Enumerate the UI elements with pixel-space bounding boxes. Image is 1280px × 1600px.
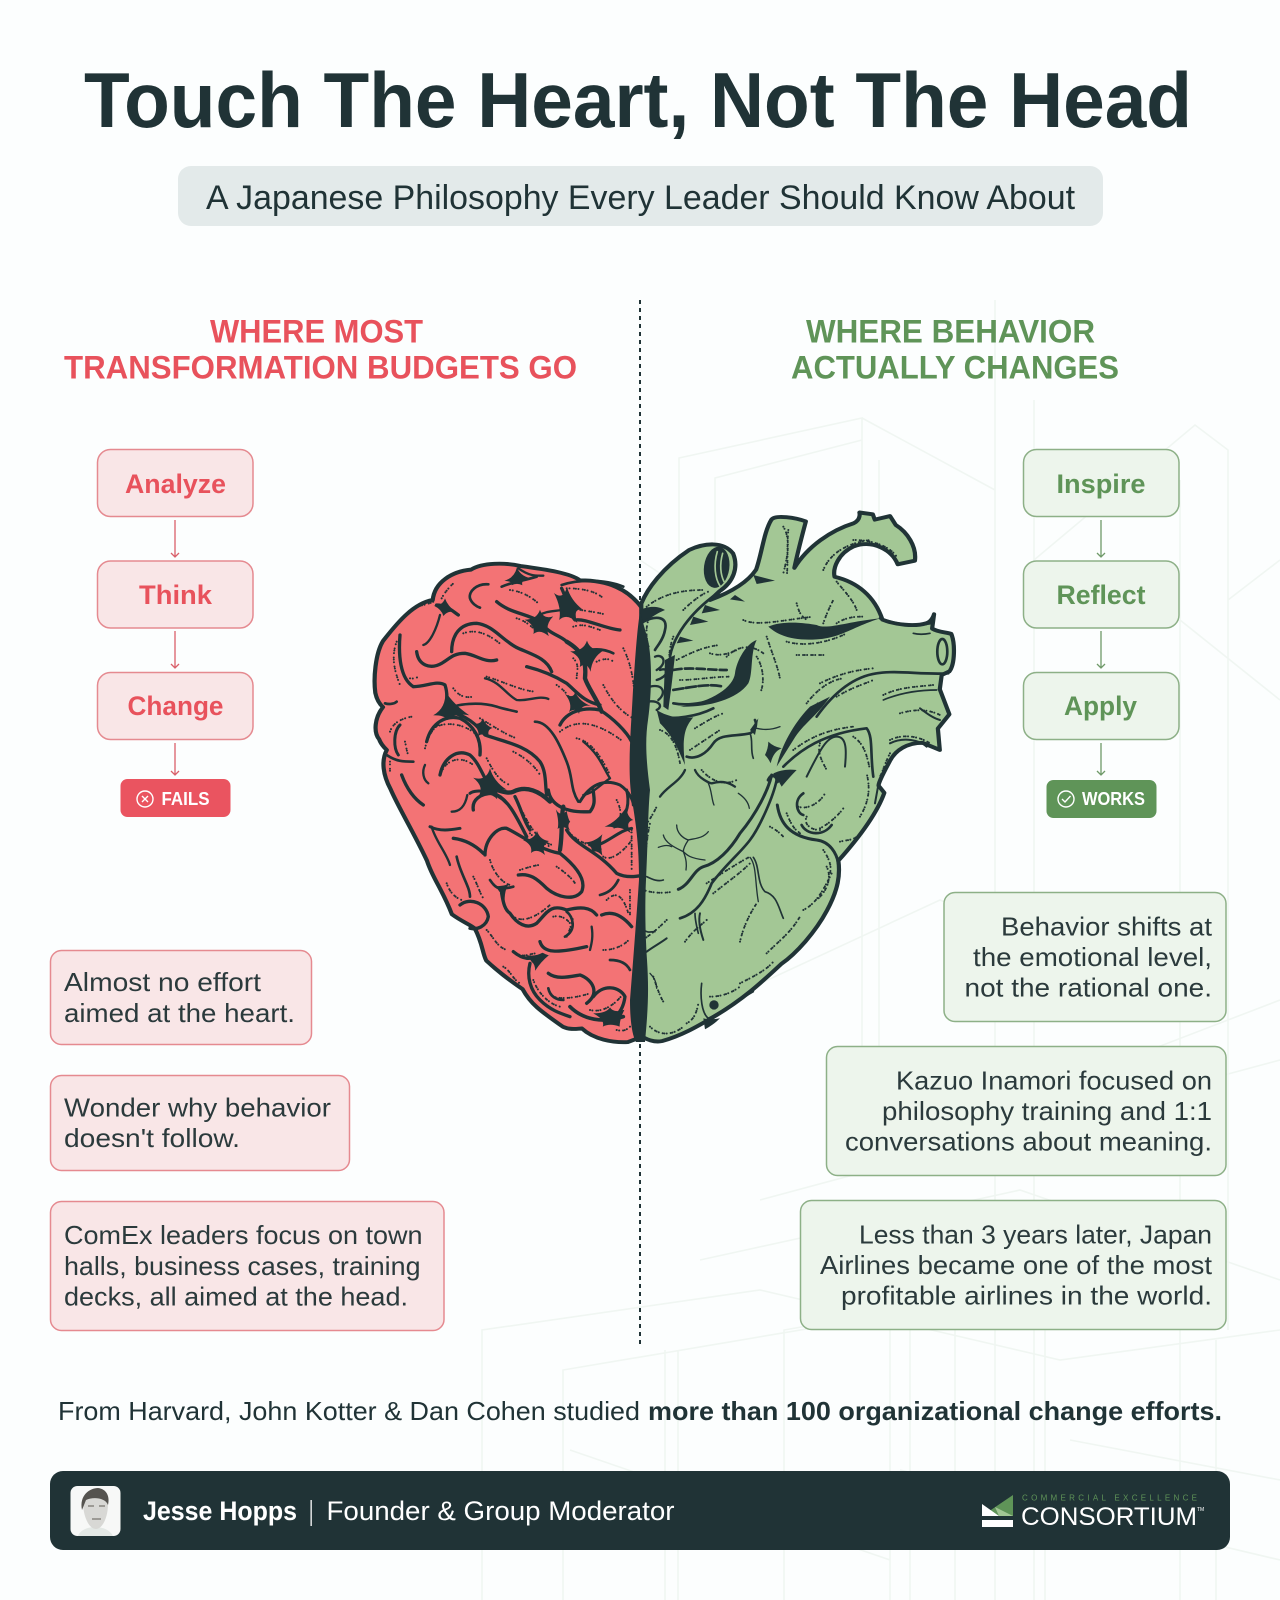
heading: where most transformation budgets go [64,314,577,386]
card: almost no effort: aimed at the heart. [64,998,295,1028]
badge: fails [120,779,230,817]
heart half [640,512,954,1041]
card: wonder why [50,1076,350,1170]
brain folds upper [385,568,633,805]
stippling on lower heart [642,770,869,1034]
step: apply: Apply [1064,691,1137,721]
card: japan airlines [800,1200,1226,1330]
heading: where behavior actually changes [791,314,1119,386]
card: behavior shifts: the emotional level, [973,942,1212,972]
badge: fails: FAILS [162,789,210,809]
arrow: change to fails [171,743,179,775]
stippling on upper heart [647,527,940,777]
arrow: reflect to apply [1097,631,1105,668]
footer bar [50,1471,1230,1550]
card: comex leaders: ComEx leaders focus on town [64,1220,422,1250]
heading: where behavior actually changes: ACTUALLY CHANGES [791,350,1119,386]
consortium logo [982,1494,1204,1531]
card: japan airlines: Airlines became one of the most [820,1250,1213,1280]
card: behavior shifts [944,892,1226,1022]
card: kazuo inamori: conversations about meaning. [845,1126,1212,1156]
brain folds lower [430,790,643,1020]
title: Touch The Heart, Not The Head [84,56,1192,144]
consortium logo: COMMERCIAL EXCELLENCE [1022,1494,1197,1502]
step: analyze [98,450,253,516]
step: think: Think [139,580,213,610]
source statement: more than 100 organizational change efforts. [648,1396,1222,1426]
card: almost no effort [50,950,312,1044]
subtitle pill [178,166,1103,226]
portrait [70,1486,120,1536]
badge: works [1046,780,1156,818]
arrow: think to change [171,631,179,668]
card: japan airlines: Less than 3 years later, Japan [859,1220,1212,1250]
arrow: inspire to reflect [1097,520,1105,557]
card: behavior shifts: not the rational one. [964,972,1212,1002]
center dotted divider [639,300,641,1345]
panel: heart flow [1024,450,1179,818]
heading: where most transformation budgets go: WHERE MOST [210,314,423,350]
name and role [143,1496,674,1526]
heading: where behavior actually changes: WHERE BEHAVIOR [806,314,1095,350]
card: behavior shifts: Behavior shifts at [1001,912,1213,942]
stippling on lower brain [447,800,632,1031]
card: kazuo inamori [826,1046,1226,1176]
step: change [98,672,253,740]
panel: heart cards [800,892,1226,1330]
heading: where most transformation budgets go: TRANSFORMATION BUDGETS GO [64,350,577,386]
name and role: Jesse Hopps [143,1496,297,1526]
heart vessels lower [642,770,878,1034]
card: almost no effort: Almost no effort [64,967,262,997]
heart vessels upper [640,527,948,777]
source statement [58,1396,1222,1426]
stippling on upper brain [390,583,635,785]
step: analyze: Analyze [125,469,226,499]
panel: head cards [50,950,444,1330]
brain dark junctions [433,567,633,1027]
card: wonder why: doesn't follow. [64,1123,240,1153]
arrow: analyze to think [171,520,179,557]
name and role: Founder & Group Moderator [326,1496,674,1526]
consortium logo: TM [1197,1507,1204,1513]
step: inspire: Inspire [1056,469,1146,499]
source statement: From Harvard, John Kotter & Dan Cohen studied [58,1396,640,1426]
consortium logo: CONSORTIUM [1021,1503,1197,1531]
step: inspire [1024,450,1179,516]
step: reflect: Reflect [1056,580,1146,610]
arrow: apply to works [1097,743,1105,775]
card: kazuo inamori: Kazuo Inamori focused on [896,1066,1212,1096]
card: wonder why: Wonder why behavior [64,1092,331,1122]
step: apply [1024,672,1179,740]
brain half [375,564,645,1042]
center band [630,612,651,1042]
step: change: Change [128,691,224,721]
step: reflect [1024,561,1179,628]
step: think [98,561,253,628]
badge: works: WORKS [1082,789,1145,809]
card: comex leaders: decks, all aimed at the head. [64,1282,408,1312]
card: kazuo inamori: philosophy training and 1:1 [882,1096,1212,1126]
card: japan airlines: profitable airlines in the world. [841,1280,1212,1310]
card: comex leaders [50,1202,444,1330]
subtitle pill: A Japanese Philosophy Every Leader Should Know About [206,179,1076,217]
card: comex leaders: halls, business cases, training [64,1251,420,1281]
panel: head flow [98,450,253,817]
illustration: brain and heart [375,512,954,1042]
